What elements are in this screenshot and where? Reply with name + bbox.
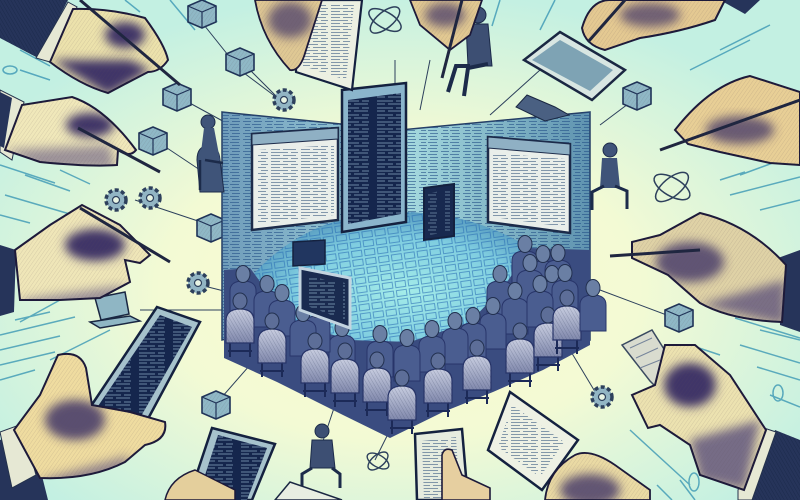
connector lines — [135, 20, 680, 460]
bottom-left hand — [0, 354, 165, 500]
left wall — [222, 112, 400, 340]
glowing floor — [240, 212, 570, 370]
curled paper, right — [622, 330, 674, 393]
floating gears and atoms — [106, 2, 694, 473]
mid-right hand — [610, 213, 800, 332]
laptop, left — [90, 292, 140, 328]
left screen — [252, 128, 338, 230]
tablet, top right — [516, 32, 625, 121]
small monitor on floor — [300, 268, 350, 328]
seated figure, top — [448, 7, 492, 96]
top-left hand — [0, 0, 180, 95]
small document, bottom — [275, 482, 342, 500]
front row — [226, 280, 606, 434]
code texture on walls — [222, 112, 590, 340]
small dark monitor, rear — [293, 240, 325, 266]
top document with hand — [255, 0, 362, 90]
floating cubes — [139, 0, 693, 419]
bottom-left phone — [85, 307, 200, 443]
floor code texture — [240, 212, 570, 370]
mid-left hand — [0, 205, 170, 316]
right screen — [488, 137, 570, 233]
top-right hand — [582, 0, 760, 50]
seated figure, right — [592, 143, 627, 210]
upper-right hand — [660, 76, 800, 165]
bottom centre tablet with hand — [415, 429, 490, 500]
seated figure, bottom — [302, 424, 340, 488]
right wall — [400, 112, 590, 340]
bottom document with hand — [488, 392, 650, 500]
central code theatre — [222, 83, 606, 438]
upper-left hand — [0, 90, 160, 172]
bottom phone — [165, 428, 275, 500]
small dark screen — [424, 184, 454, 240]
centre tall screen — [342, 83, 406, 232]
crowd base — [224, 248, 590, 438]
back row — [230, 236, 578, 381]
audience arc — [224, 236, 606, 438]
top-centre hand — [410, 0, 482, 78]
seated figure, left — [197, 115, 224, 192]
bottom-right hand — [632, 345, 800, 500]
